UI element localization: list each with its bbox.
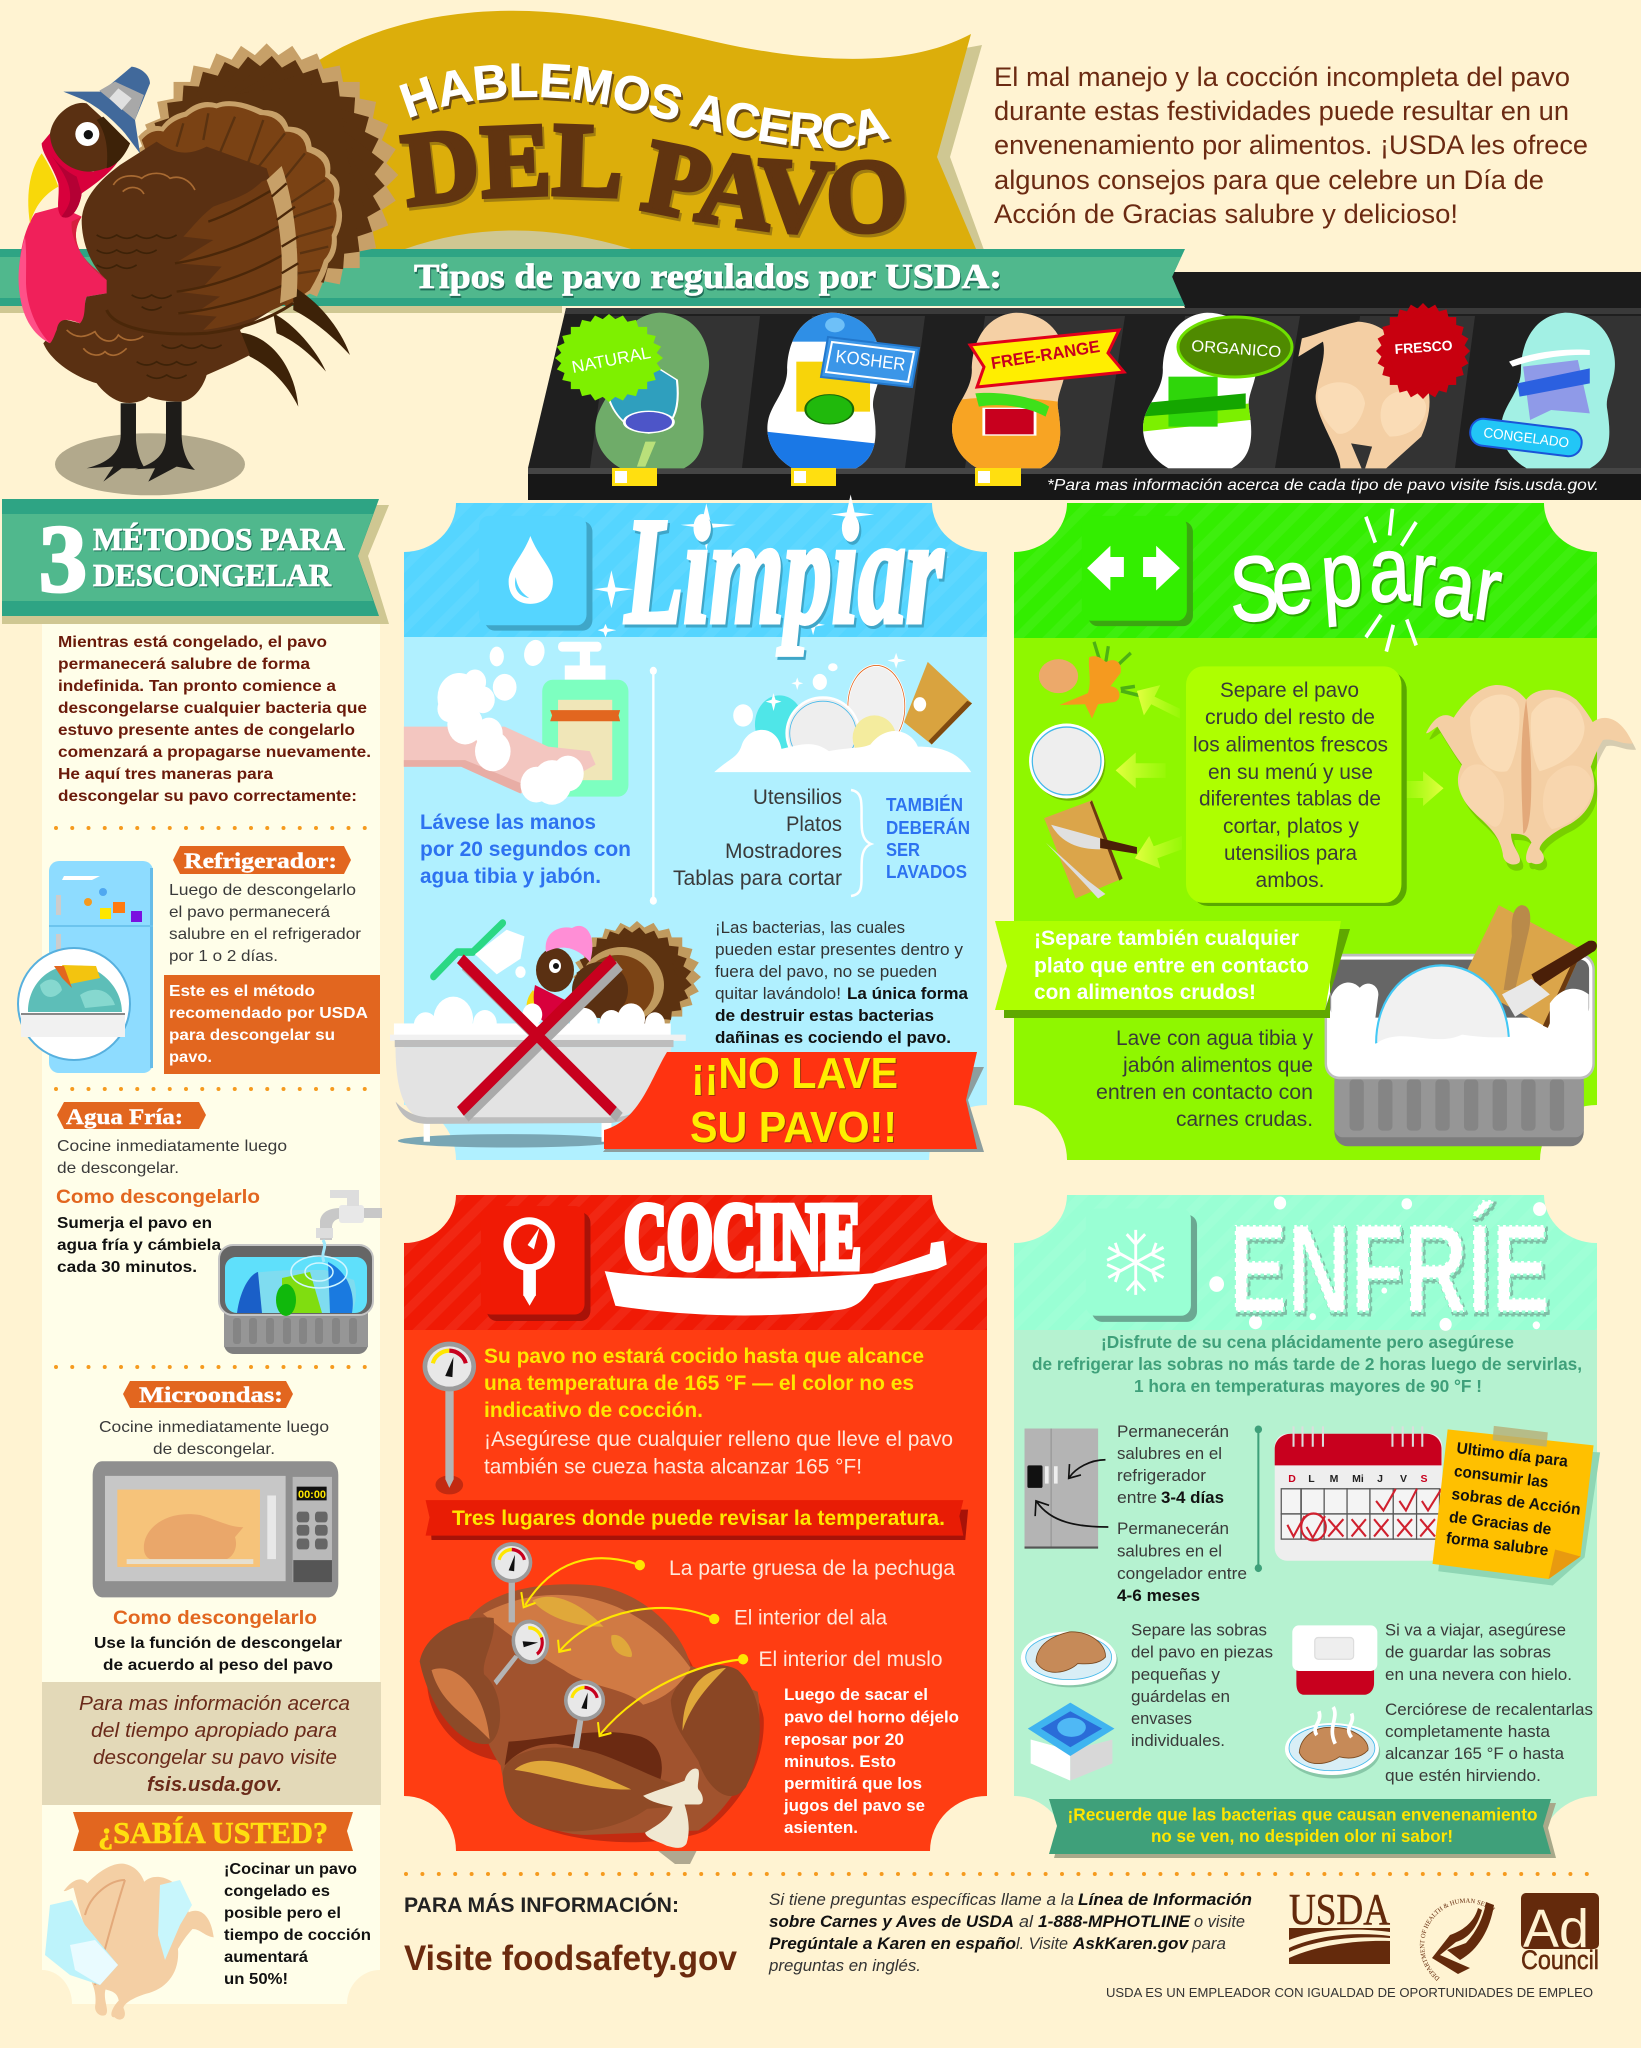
contact paragraph: Pregúntale a Karen en españo [769,1934,1016,1953]
intro text: He aquí tres maneras para [58,766,273,783]
panel: enfrie [1014,1195,1600,1858]
sticky note text: forma salubre [1445,1530,1549,1560]
intro text: Mientras está congelado, el pavo [58,634,327,651]
contact paragraph: o visite [1194,1912,1245,1931]
fridge text: salubre en el refrigerador [169,926,362,943]
microwave text: de descongelar. [153,1441,275,1458]
leftovers text: envases [1131,1710,1192,1728]
items list: Mostradores [725,840,842,863]
intro paragraph: Acción de Gracias salubre y delicioso! [994,199,1458,229]
fridge text: por 1 o 2 días. [169,948,278,965]
product: organico [1143,312,1256,468]
flag banner with title: DEL PAVO [398,123,907,238]
intro paragraph [994,62,1588,229]
wash text [1096,1027,1313,1131]
items list: Utensilios [753,786,842,809]
turkey wattle [42,133,120,218]
bacteria text: de destruir estas bacterias [715,1006,934,1025]
icon: hand and soap [404,636,628,805]
icon: wash basin [1326,905,1597,1146]
temperature warning: Su pavo no estará cocido hasta que alcance [484,1345,924,1368]
microwave text [99,1419,329,1458]
logo: health and human services: DEPARTMENT OF HEALTH & HUMAN SERVICES · USA [1420,1898,1496,1982]
icon: container [1028,1703,1114,1781]
pan [605,1241,947,1315]
more information box: del tiempo apropiado para [91,1720,337,1742]
sticky note text: Ultimo día para [1456,1440,1569,1471]
refrigerate text [1032,1332,1582,1396]
bacteria text [715,918,969,1047]
sticky note text [1445,1440,1582,1560]
tag: agua fria: Agua Fría: [66,1104,183,1129]
raw turkey [1426,685,1636,871]
did you know text [224,1861,371,1988]
icon: plate of leftovers [1021,1631,1118,1687]
red X [465,965,619,1117]
calendar day labels: J [1377,1473,1383,1485]
tambien text: TAMBIÉN [886,794,963,815]
storage text: 3-4 días [1161,1489,1224,1507]
tag: refrigerador [173,846,351,874]
reheat text: alcanzar 165 °F o hasta [1385,1745,1565,1763]
icon: frozen turkey [37,1851,226,2037]
fridge text: Luego de descongelarlo [169,882,356,899]
items list: Platos [786,813,842,836]
more information box: descongelar su pavo visite [93,1747,337,1769]
thermometers [491,1542,605,1748]
icon: microwave [93,1461,338,1597]
icon: vegetables [1039,642,1139,719]
label: congelado: CONGELADO [1483,424,1570,450]
icon: plate [1029,723,1105,801]
label: kosher: KOSHER [835,346,906,375]
product: congelado [1501,313,1615,468]
microwave instructions: Use la función de descongelar [94,1635,342,1652]
thawing methods banner: DESCONGELAR [93,557,332,593]
label: free-range: FREE-RANGE [990,337,1101,373]
intro paragraph: El mal manejo y la cocción incompleta del pavo [994,62,1570,92]
separar callout text: crudo del resto de [1205,706,1375,729]
shelf of turkey types [528,272,1641,500]
temperature warning: indicativo de cocción. [484,1399,703,1422]
stuffing text [484,1428,953,1478]
price tags [612,468,1021,486]
intro paragraph: durante estas festividades puede resultar en un [994,96,1569,126]
separar callout text: en su menú y use [1208,761,1373,784]
leftovers text [1131,1622,1273,1750]
more information box: Para mas información acerca [79,1693,350,1715]
product: kosher [767,312,878,468]
did you know text: posible pero el [224,1905,341,1922]
icon tile: arrows [1082,516,1193,626]
callout: recommended method: recomendado por USDA [169,1005,368,1022]
cold water text [56,1138,287,1276]
wash text: carnes crudas. [1176,1108,1313,1131]
turkey beak [28,153,58,223]
icon tile: snowflake [1086,1209,1197,1322]
temperature warning: una temperatura de 165 °F — el color no es [484,1372,914,1395]
limpiar texts [420,786,970,1047]
separar callout text [1193,679,1388,892]
reheat text: Cerciórese de recalentarlas [1385,1701,1593,1719]
icon: tub shadow and feet [398,1122,619,1148]
sparkles [594,494,949,637]
no lave ribbon [603,1049,984,1152]
cold water text: Cocine inmediatamente luego [57,1138,287,1155]
refrigerate text: ¡Disfrute de su cena plácidamente pero asegúrese [1101,1332,1514,1352]
wash text: Lave con agua tibia y [1116,1027,1313,1050]
contact paragraph: Si tiene preguntas específicas llame a la [769,1890,1074,1909]
contact paragraph: preguntas en inglés. [768,1956,921,1975]
storage text: Permanecerán [1117,1423,1229,1441]
calendar day labels: S [1420,1473,1428,1485]
separar callout text: utensilios para [1224,842,1357,865]
panel: limpiar [390,487,987,1160]
product: free-range [952,312,1064,468]
microwave text: Cocine inmediatamente luego [99,1419,329,1436]
products, zoom-space artwork [595,303,1615,477]
yellow pointers [521,1558,743,1736]
travel text: en una nevera con hielo. [1385,1666,1572,1684]
icon: fridge with frozen turkey [18,861,153,1073]
travel text [1385,1622,1572,1684]
intro text: indefinida. Tan pronto comience a [58,678,336,695]
calendar day labels: Mi [1352,1473,1364,1485]
storage text: salubres en el [1117,1542,1222,1560]
icon tile: thermometer [481,1206,590,1321]
panel: cocine [404,1185,987,1851]
microwave instructions: Como descongelarlo [113,1608,317,1629]
turkey tail feathers [227,287,350,407]
tambien text [886,794,970,882]
thawing methods banner: MÉTODOS PARA [93,521,345,557]
pointer labels: El interior del ala [734,1606,887,1630]
turkey hat [63,67,150,153]
separar callout text: los alimentos frescos [1193,734,1388,756]
travel text: Si va a viajar, asegúrese [1385,1622,1566,1640]
bacteria reminder banner: no se ven, no despiden olor ni sabor! [1151,1826,1453,1846]
cold water text: Como descongelarlo [56,1187,260,1208]
bacteria text: quitar lavándolo! [715,984,841,1003]
tambien text: SER [886,840,920,860]
bacteria text: La única forma [847,984,969,1003]
snow dots [1209,1196,1546,1331]
fridge text: el pavo permanecerá [169,904,330,921]
storage text: congelador entre [1117,1565,1247,1583]
more information box: fsis.usda.gov. [147,1774,282,1796]
separate plates banner: ¡Separe también cualquier [1034,927,1299,950]
wash text: entren en contacto con [1096,1081,1313,1104]
calendar day labels [1288,1473,1428,1485]
label: natural [555,314,663,402]
icon: calendar [1275,1426,1442,1561]
bacteria text: ¡Las bacterias, las cuales [715,918,905,937]
banner heading: Tipos de pavo regulados por USDA: [414,257,1002,296]
limpiar heading: Limpiar [624,487,944,655]
pointer labels: El interior del muslo [758,1648,942,1671]
turkey shadow [55,433,245,495]
hands text [420,811,631,888]
microwave instructions [94,1608,342,1674]
flag banner with title [320,10,984,249]
brace [851,790,871,896]
storage text: salubres en el [1117,1445,1222,1463]
fridge text [169,882,362,965]
cold water text: cada 30 minutos. [57,1259,197,1276]
icon: sink with faucet [219,1190,382,1354]
callout text box [1186,666,1407,906]
separar callout text: cortar, platos y [1223,815,1359,838]
separate plates banner: plato que entre en contacto [1034,954,1309,978]
tag: microondas [123,1381,293,1408]
turkey head [50,103,130,172]
did you know text: congelado es [224,1883,330,1900]
no lave ribbon: ¡¡NO LAVE [691,1049,898,1098]
sticky note text: de Gracias de [1448,1509,1552,1539]
cold water text: agua fría y cámbiela [57,1237,221,1254]
turkey bone shadow [657,1850,697,1864]
tag: refrigerador: Refrigerador: [184,848,337,873]
logo: usda [1289,1885,1390,1964]
leftovers text: Separe las sobras [1131,1622,1267,1640]
intro text: descongelar su pavo correctamente: [58,788,357,805]
callout: recommended method: Este es el método [169,983,315,1000]
stuffing text: ¡Asegúrese que cualquier relleno que lleve el pavo [484,1428,953,1451]
icon: cutting board, knife and fork [1044,800,1137,898]
separar callout text: Separe el pavo [1220,679,1359,702]
label: free-range [970,330,1124,387]
storage text: 4-6 meses [1117,1587,1200,1605]
cold water text: Sumerja el pavo en [57,1215,212,1232]
logo: ad council: Council [1521,1945,1599,1975]
divider [650,671,656,901]
intro text: descongelarse cualquier bacteria que [58,700,367,717]
reheat text: completamente hasta [1385,1723,1551,1741]
thawing methods banner [2,499,389,624]
did you know text: tiempo de cocción [224,1927,371,1944]
intro text: comenzará a propagarse nuevamente. [58,744,371,761]
items list [673,786,842,890]
resting text: Luego de sacar el [784,1685,928,1704]
resting text: permitirá que los [784,1774,922,1793]
product: fresco raw turkey [1298,322,1430,468]
calendar day labels: V [1400,1473,1407,1485]
intro text: estuvo presente antes de congelarlo [58,722,355,739]
did you know ribbon: ¿SABÍA USTED? [98,1815,328,1850]
stuffing text: también se cueza hasta alcanzar 165 °F! [484,1456,862,1478]
resting text: pavo del horno déjelo [784,1708,959,1726]
no lave ribbon: SU PAVO!! [690,1103,897,1152]
separar callout text: ambos. [1256,869,1324,892]
turkey wing [175,173,287,330]
contact paragraph: 1-888-MPHOTLINE [1038,1912,1191,1931]
travel text: de guardar las sobras [1385,1644,1551,1662]
bacteria reminder banner [1049,1799,1556,1858]
icon: hot plate [1285,1707,1380,1779]
storage text: Permanecerán [1117,1520,1229,1538]
intro text: permanecerá salubre de forma [58,656,310,673]
logo: ad council: Ad [1523,1899,1589,1959]
bacteria text: dañinas es cociendo el pavo. [715,1028,951,1047]
sticky note [1433,1426,1600,1586]
separate plates banner [995,921,1350,1018]
icon tile: water drop [479,516,592,631]
icon: cooler [1292,1625,1377,1695]
scrub brush [433,923,503,977]
calendar day labels: M [1330,1473,1339,1485]
logo: usda: USDA [1289,1885,1390,1934]
bathtub [390,923,686,1124]
hands text: por 20 segundos con [420,838,631,861]
label: kosher [821,337,919,387]
bacteria text: fuera del pavo, no se pueden [715,962,937,981]
icon: fridge [1025,1429,1108,1549]
storage text: refrigerador [1117,1467,1207,1485]
label: natural: NATURAL [570,343,652,377]
resting text: reposar por 20 [784,1730,904,1749]
wash text: jabón alimentos que [1122,1054,1313,1077]
rays [1366,509,1416,652]
did you know text: aumentará [224,1949,308,1966]
calendar day labels: D [1288,1473,1296,1485]
tag: microondas: Microondas: [139,1382,283,1407]
ribbon text: Tres lugares donde puede revisar la temperatura. [452,1507,945,1530]
label: organico: ORGANICO [1191,338,1282,361]
resting text [783,1685,959,1837]
website: Visite foodsafety.gov [404,1939,738,1978]
label: fresco [1376,303,1470,399]
turkey fan [133,43,398,307]
did you know text: un 50%! [224,1971,288,1988]
thermometer [423,1342,476,1494]
reheat text [1385,1701,1593,1785]
turkey chest [19,207,107,343]
cocine heading: COCINE [624,1185,861,1289]
resting text: asienten. [784,1818,858,1837]
contact paragraph: Línea de Información [1078,1890,1252,1909]
cold water text: de descongelar. [57,1160,179,1177]
refrigerate text: 1 hora en temperaturas mayores de 90 °F ! [1134,1376,1482,1396]
contact paragraph: para [1191,1934,1226,1953]
title line: Hablemos acerca [408,97,892,147]
tambien text: LAVADOS [886,862,967,882]
leftovers text: del pavo en piezas [1131,1644,1273,1662]
divider [1256,1429,1261,1568]
items list: Tablas para cortar [673,867,842,890]
turkey mascot [19,43,398,495]
icon: washing dishes [714,653,972,772]
types banner [0,249,1185,313]
leftovers text: pequeñas y [1131,1666,1221,1684]
callout: recommended method: pavo. [169,1049,212,1066]
storage text: entre [1117,1489,1157,1507]
intro paragraph: algunos consejos para que celebre un Día de [994,165,1544,195]
contact paragraph: al [1019,1912,1034,1931]
separar heading: Separar [1228,517,1508,642]
tag: agua fria [57,1102,206,1129]
contact paragraph [768,1890,1252,1975]
limpiar art [398,494,972,1148]
did you know text: ¡Cocinar un pavo [224,1861,357,1878]
left column panel [42,624,380,2004]
temperature warning [484,1345,924,1422]
tambien text: DEBERÁN [886,817,970,838]
microwave display: 00:00 [298,1489,326,1501]
resting text: jugos del pavo se [783,1796,925,1815]
equal opportunity note: USDA ES UN EMPLEADOR CON IGUALDAD DE OPORTUNIDADES DE EMPLEO [1106,1985,1593,2000]
bacteria reminder banner: ¡Recuerde que las bacterias que causan envenenamiento [1068,1804,1538,1824]
contact paragraph: sobre Carnes y Aves de USDA [769,1912,1014,1931]
pointer labels: La parte gruesa de la pechuga [669,1557,955,1580]
leftovers text: individuales. [1131,1732,1225,1750]
contact paragraph: l. Visite [1016,1934,1068,1953]
label: fresco: FRESCO [1394,337,1453,357]
hands text: agua tibia y jabón. [420,865,601,888]
microwave instructions: de acuerdo al peso del pavo [103,1657,333,1674]
contact paragraph: AskKaren.gov [1072,1934,1190,1953]
label: organico [1178,317,1292,377]
shelf note: *Para mas información acerca de cada tipo de pavo visite fsis.usda.gov. [1047,477,1599,494]
turkey in tub [527,921,701,1037]
separate plates banner: con alimentos crudos! [1034,981,1256,1004]
product: natural [595,313,709,468]
logo: ad council [1521,1893,1599,1975]
intro text [58,634,371,805]
resting text: minutos. Esto [784,1752,896,1771]
pointer labels [669,1557,955,1671]
more info heading: PARA MÁS INFORMACIÓN: [404,1893,679,1917]
cooked turkey [420,1584,764,1848]
reheat text: que estén hirviendo. [1385,1767,1541,1785]
sticky note text: sobras de Acción [1451,1486,1582,1519]
intro paragraph: envenenamiento por alimentos. ¡USDA les ofrece [994,130,1588,160]
sticky note text: consumir las [1453,1463,1549,1492]
title line: Del Pavo [408,194,918,232]
storage text [1117,1423,1247,1605]
more information box [42,1682,381,1805]
turkey body [43,142,298,403]
calendar day labels: L [1308,1473,1315,1485]
hands text: Lávese las manos [420,811,596,834]
separar callout text: diferentes tablas de [1199,788,1381,810]
bacteria text: pueden estar presentes dentro y [715,940,963,959]
label: congelado [1469,417,1583,458]
refrigerate text: de refrigerar las sobras no más tarde de 2 horas luego de servirlas, [1032,1354,1582,1374]
leftovers text: guárdelas en [1131,1688,1230,1706]
temperature ribbon [426,1500,968,1540]
arrows [1116,685,1444,869]
flag banner with title: HABLEMOS ACERCA [399,63,892,152]
callout: recommended method [164,975,380,1074]
panel: separar [995,503,1636,1160]
callout: recommended method: para descongelar su [169,1027,335,1044]
thawing methods banner: 3 [39,505,87,612]
turkey legs [87,402,195,482]
